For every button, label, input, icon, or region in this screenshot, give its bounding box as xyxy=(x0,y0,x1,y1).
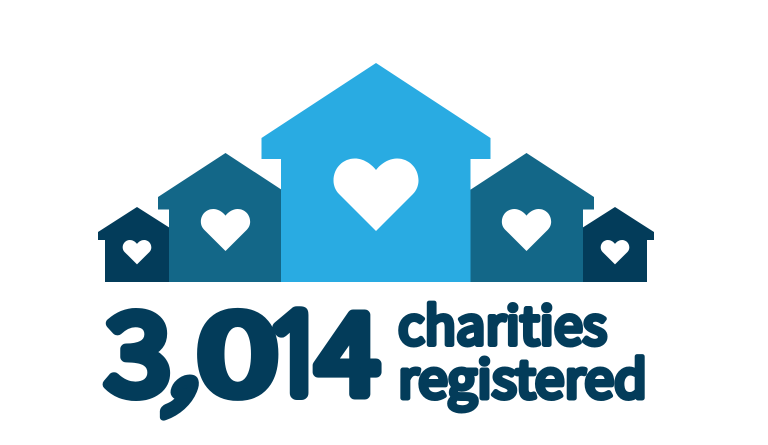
icon: medium house left xyxy=(158,153,282,282)
headline number: 3 xyxy=(105,267,171,427)
label: registered: registered xyxy=(398,338,647,413)
icon: medium house right xyxy=(470,153,594,282)
headline number: 4 xyxy=(316,266,379,427)
icon: small house left xyxy=(98,207,170,282)
icon: large house centre xyxy=(262,63,490,282)
icon: small house right xyxy=(582,207,654,282)
headline number: 0 xyxy=(197,266,278,426)
label: charities: charities xyxy=(398,284,607,360)
headline number: 1 xyxy=(262,299,329,410)
headline number xyxy=(105,266,379,427)
headline number: , xyxy=(153,266,249,427)
